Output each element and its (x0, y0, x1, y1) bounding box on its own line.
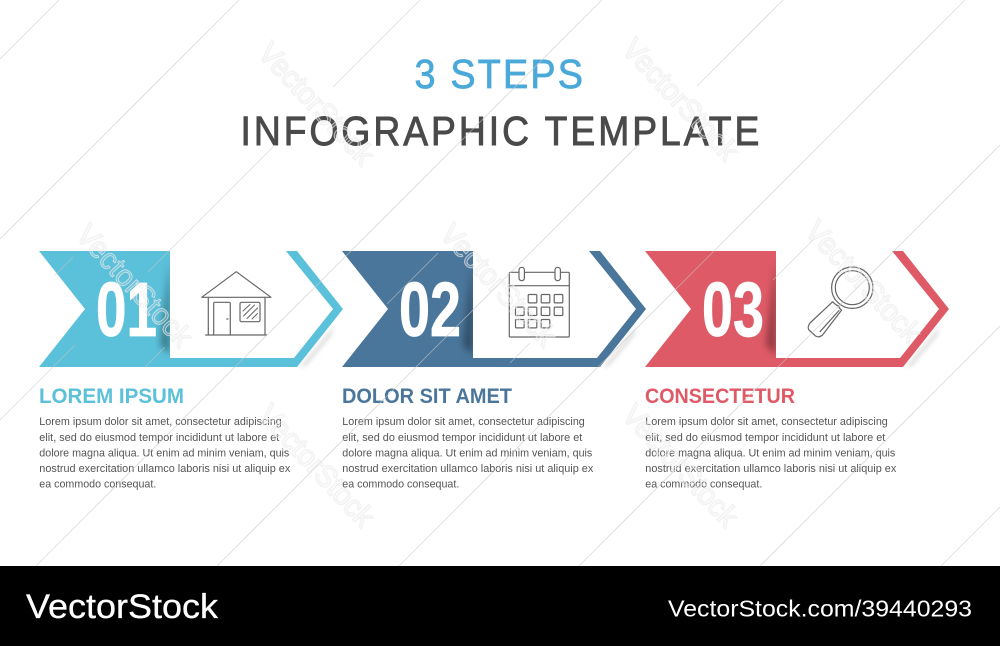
watermarks: VectorStock (615, 32, 745, 168)
footer bar (0, 566, 1000, 646)
watermarks: VectorStock (69, 218, 199, 354)
body text: step 2: dolore magna aliqua. Ut enim ad minim veniam, quis (342, 448, 593, 460)
body text: step 3: dolore magna aliqua. Ut enim ad minim veniam, quis (645, 448, 896, 460)
body text: step 1: Lorem ipsum dolor sit amet, consectetur adipiscing (39, 416, 282, 428)
arrow: step 1 (39, 251, 343, 367)
panel: step 2 (342, 251, 646, 490)
body text: step 3 (645, 416, 897, 490)
curl shadow: step 3 (906, 326, 940, 367)
title line: 3 steps: 3 STEPS (414, 52, 583, 97)
fold shadow: step 2 (463, 260, 473, 355)
body text: step 1: dolore magna aliqua. Ut enim ad minim veniam, quis (39, 448, 290, 460)
footer logo text: VectorStock (26, 588, 219, 626)
body text: step 3: Lorem ipsum dolor sit amet, consectetur adipiscing (645, 416, 888, 428)
watermarks: VectorStock (798, 214, 928, 350)
fold shadow: step 1 (160, 260, 170, 355)
body text: step 1: nostrud exercitation ullamco laboris nisi ut aliquip ex (39, 463, 291, 475)
body text: step 3: ea commodo consequat. (645, 478, 762, 490)
body text: step 2: elit, sed do eiusmod tempor incididunt ut labore et (342, 432, 583, 444)
heading: lorem ipsum: LOREM IPSUM (39, 384, 184, 408)
watermarks: VectorStock (615, 32, 745, 168)
number: 01: 01 (96, 267, 157, 353)
icon: house (202, 272, 271, 335)
watermarks: VectorStock (615, 398, 745, 534)
heading: dolor sit amet: DOLOR SIT AMET (342, 384, 512, 408)
body text: step 3: elit, sed do eiusmod tempor incididunt ut labore et (645, 432, 886, 444)
panel: step 3 (645, 251, 949, 490)
watermarks: VectorStock (251, 36, 381, 172)
number: 03: 03 (702, 267, 764, 353)
body text: step 2: Lorem ipsum dolor sit amet, consectetur adipiscing (342, 416, 585, 428)
title line: infographic template: INFOGRAPHIC TEMPLATE (240, 110, 759, 154)
body text: step 2: nostrud exercitation ullamco laboris nisi ut aliquip ex (342, 463, 594, 475)
body text: step 1 (39, 416, 291, 490)
watermarks: VectorStock (251, 398, 381, 534)
body text: step 3: nostrud exercitation ullamco laboris nisi ut aliquip ex (645, 463, 897, 475)
body text: step 2 (342, 416, 594, 490)
watermarks: VectorStock (251, 36, 381, 172)
curl shadow: step 1 (300, 326, 334, 367)
footer image id: VectorStock.com/39440293 (668, 596, 972, 622)
body text: step 2: ea commodo consequat. (342, 478, 459, 490)
number: 02: 02 (399, 267, 461, 353)
arrow: step 3 (645, 251, 949, 367)
title (240, 52, 759, 154)
watermarks: VectorStock (615, 398, 745, 534)
curl shadow: step 2 (603, 326, 637, 367)
watermarks: VectorStock (69, 218, 199, 354)
watermarks: VectorStock (798, 214, 928, 350)
watermarks (69, 32, 928, 534)
icon: magnifying glass (808, 267, 873, 337)
arrow: step 2 (342, 251, 646, 367)
body text: step 1: elit, sed do eiusmod tempor incididunt ut labore et (39, 432, 280, 444)
panel: step 1 (39, 251, 343, 490)
watermarks: VectorStock (433, 217, 563, 353)
icon: calendar (509, 267, 569, 337)
watermarks: VectorStock (251, 398, 381, 534)
fold shadow: step 3 (766, 260, 776, 355)
watermarks: VectorStock (433, 217, 563, 353)
body text: step 1: ea commodo consequat. (39, 478, 156, 490)
heading: consectetur: CONSECTETUR (645, 384, 795, 408)
